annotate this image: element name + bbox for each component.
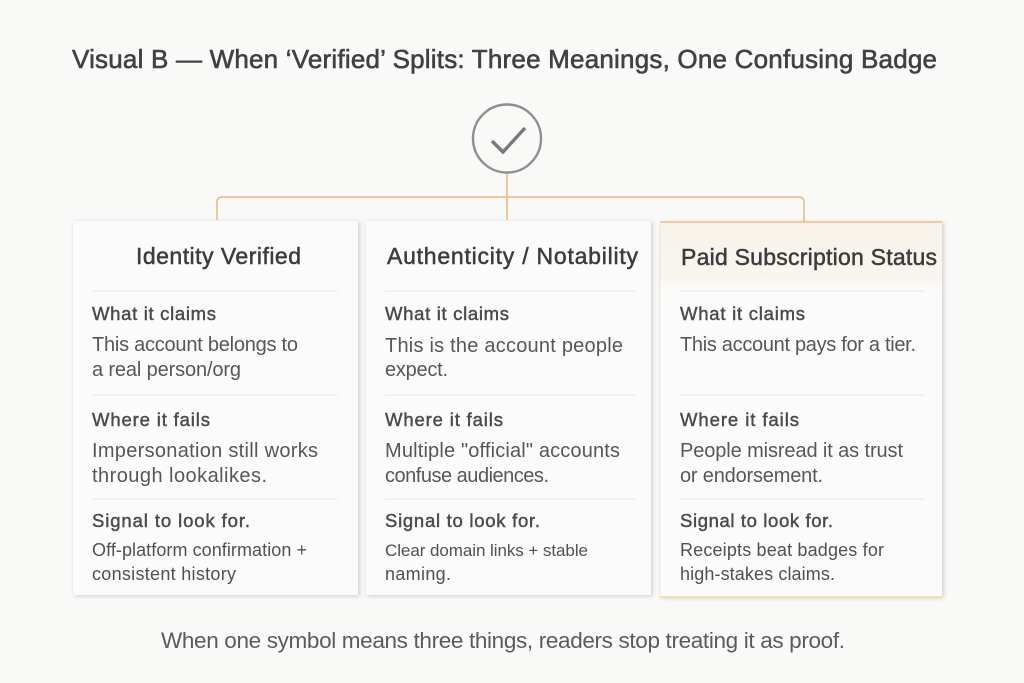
section: where it fails: Where it fails <box>385 409 503 430</box>
section: signal to look for: naming. <box>385 564 451 584</box>
section: what it claims: What it claims <box>92 303 216 324</box>
section: where it fails <box>680 409 903 487</box>
section: signal to look for <box>92 510 307 584</box>
section: signal to look for: consistent history <box>92 564 236 584</box>
section: what it claims <box>92 303 298 381</box>
footer caption: When one symbol means three things, readers stop treating it as proof. <box>161 628 845 653</box>
section: where it fails: Impersonation still works <box>92 440 318 462</box>
section: what it claims <box>385 303 623 381</box>
section: what it claims: This account belongs to <box>92 334 298 356</box>
section: where it fails <box>92 409 318 487</box>
section: what it claims: expect. <box>385 359 448 381</box>
section: where it fails: People misread it as trust <box>680 440 903 462</box>
section: what it claims: What it claims <box>385 303 509 324</box>
icon: verified check badge <box>473 104 541 172</box>
section: what it claims: This account pays for a tier. <box>680 334 916 356</box>
section: what it claims: What it claims <box>680 303 805 324</box>
connector lines <box>217 173 804 222</box>
section: where it fails: through lookalikes. <box>92 465 267 487</box>
section: signal to look for: Signal to look for. <box>680 510 833 531</box>
section: where it fails: Where it fails <box>92 409 210 430</box>
heading: paid subscription status: Paid Subscription Status <box>681 244 937 270</box>
heading: authenticity / notability: Authenticity / Notability <box>387 243 638 269</box>
section: where it fails: Multiple "official" accounts <box>385 440 620 462</box>
section: what it claims: This is the account people <box>385 335 623 357</box>
title: Visual B — When ‘Verified’ Splits: Three Meanings, One Confusing Badge <box>72 44 937 74</box>
section: signal to look for: Signal to look for. <box>92 510 250 531</box>
panel: paid subscription status <box>660 222 942 597</box>
section: signal to look for: Receipts beat badges for <box>680 540 884 560</box>
section: where it fails <box>385 409 620 487</box>
section: where it fails: Where it fails <box>680 409 799 430</box>
section: signal to look for <box>680 510 884 584</box>
section: signal to look for: Signal to look for. <box>385 510 540 531</box>
section: signal to look for: Clear domain links + stable <box>385 541 588 560</box>
section: signal to look for <box>385 510 588 584</box>
panel: identity verified <box>73 221 358 595</box>
section: where it fails: or endorsement. <box>680 465 823 487</box>
panel: authenticity / notability <box>366 221 651 595</box>
section: signal to look for: Off-platform confirmation + <box>92 540 307 560</box>
section: what it claims <box>680 303 916 356</box>
section: what it claims: a real person/org <box>92 359 241 381</box>
section: where it fails: confuse audiences. <box>385 465 549 487</box>
heading: identity verified: Identity Verified <box>136 243 301 269</box>
section: signal to look for: high-stakes claims. <box>680 564 835 584</box>
